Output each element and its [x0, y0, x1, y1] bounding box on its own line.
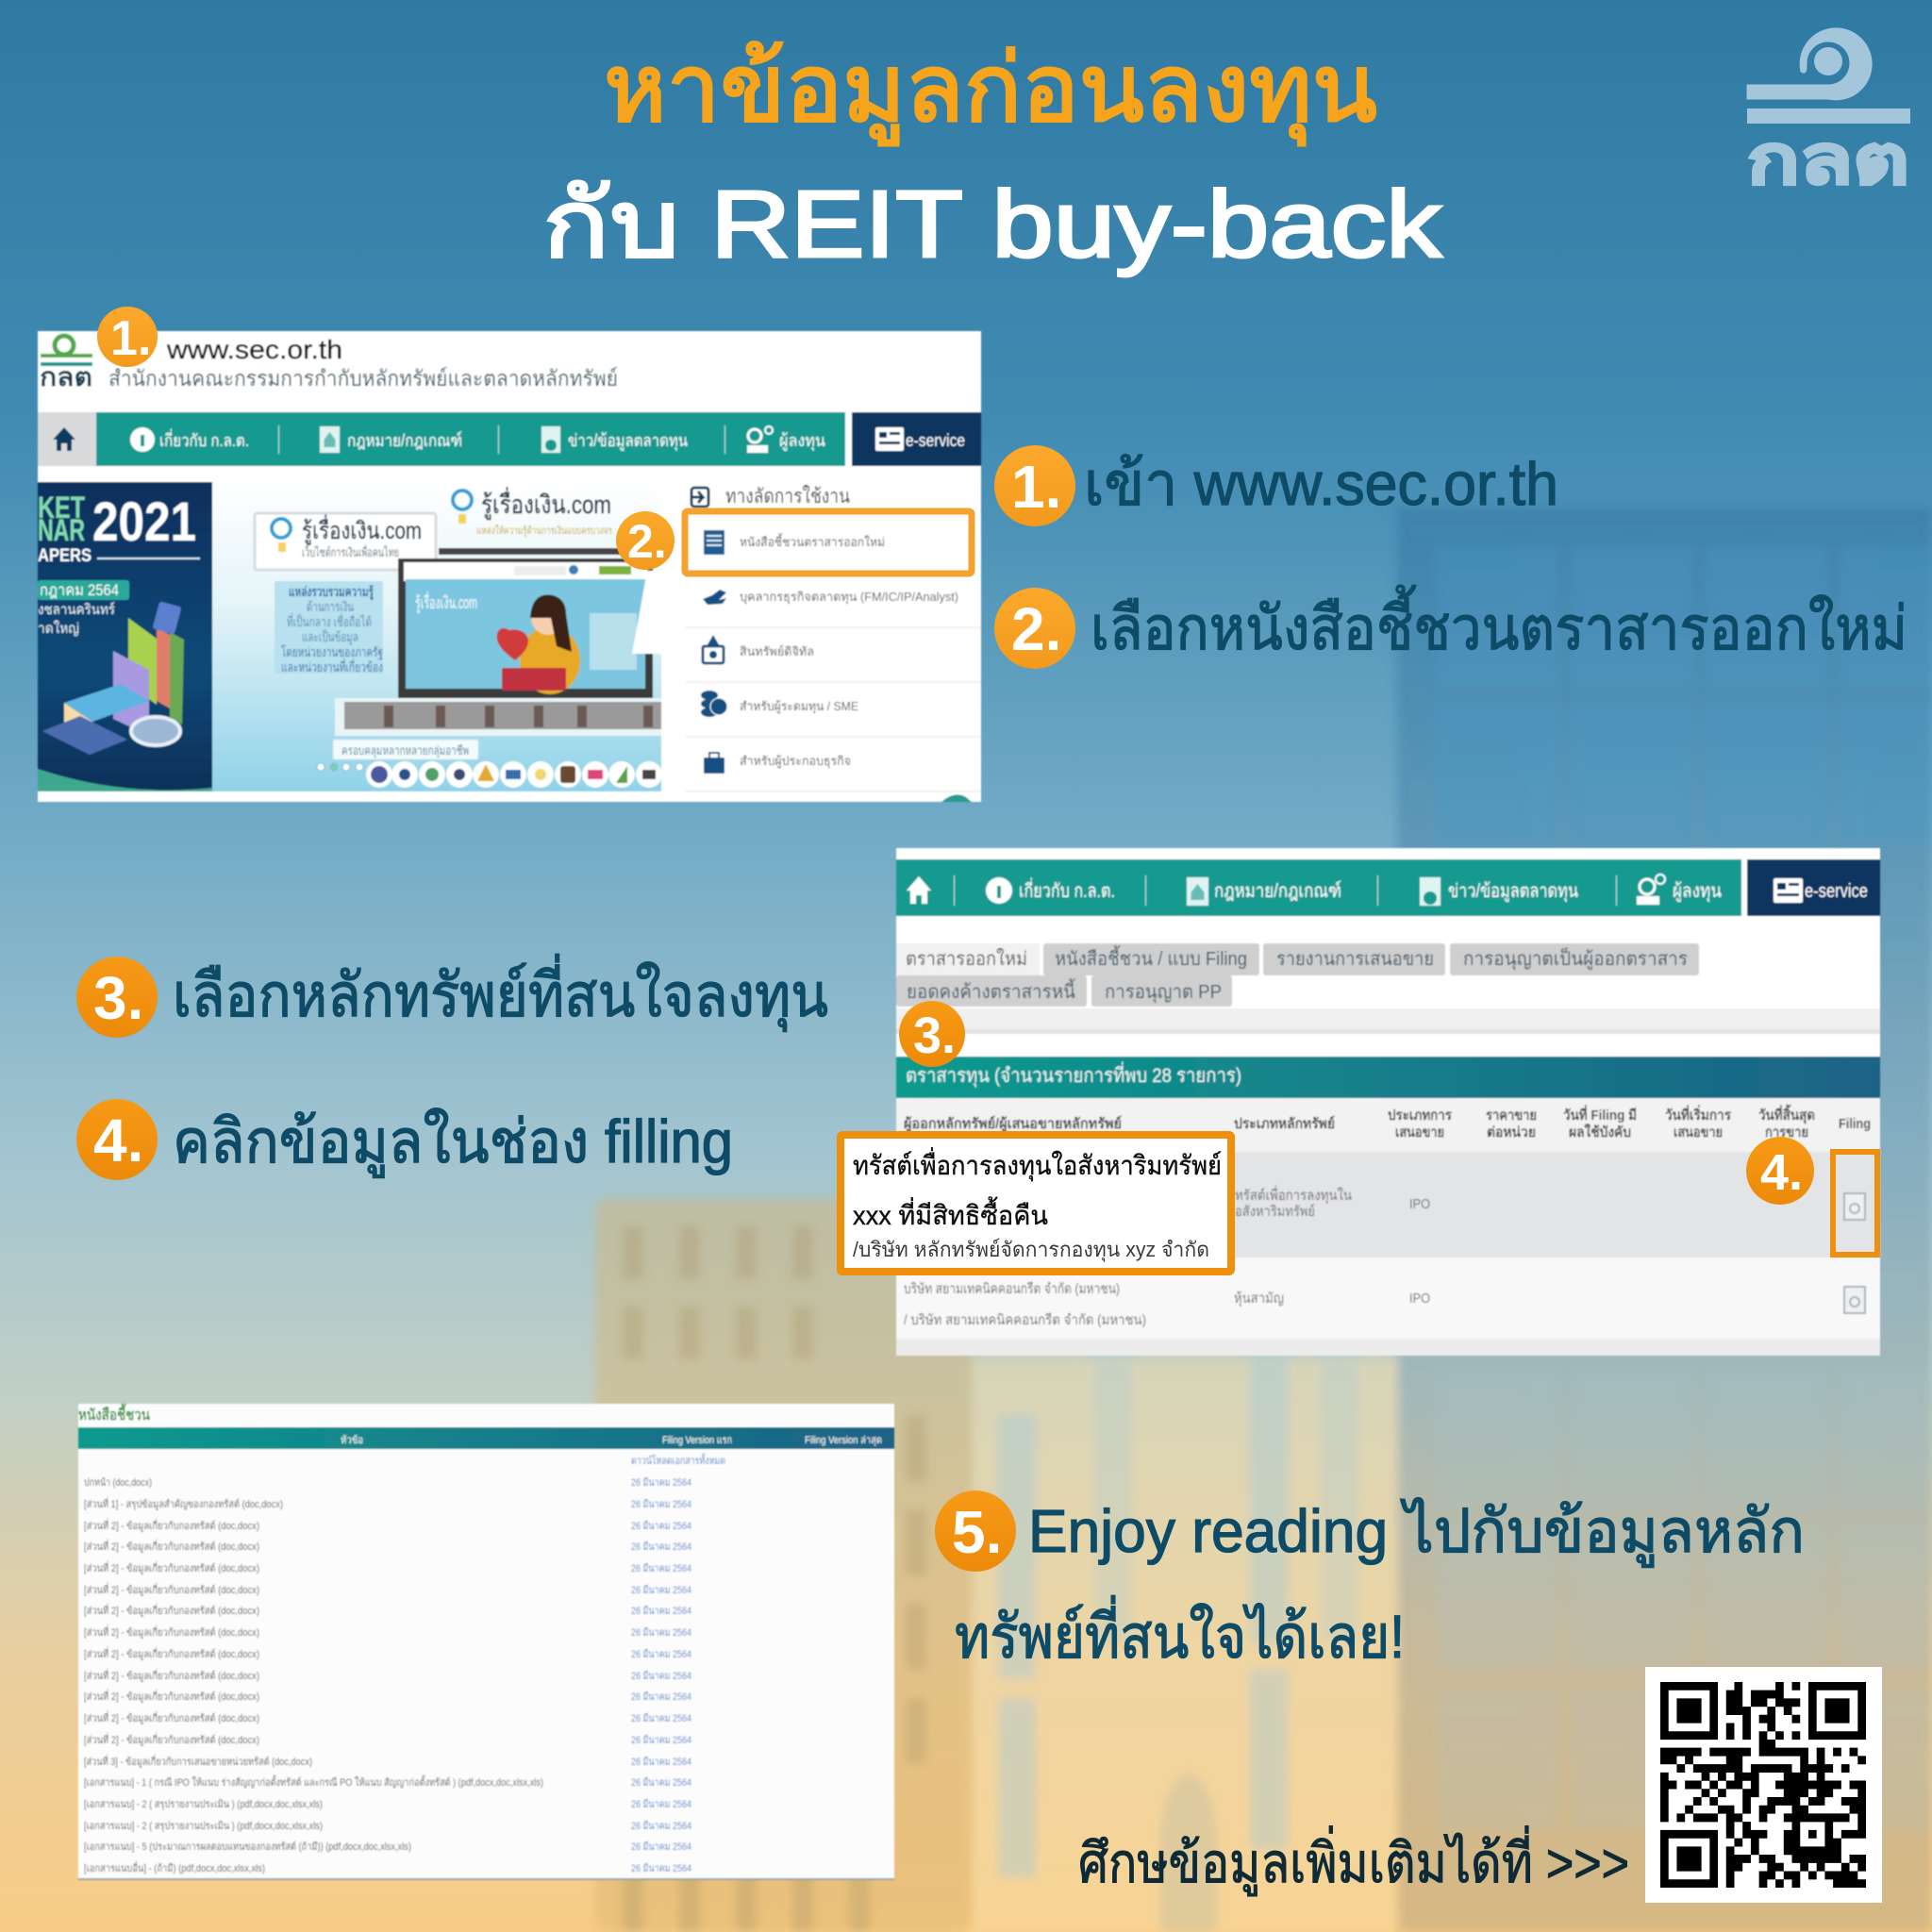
step 1 instruction — [994, 445, 1558, 526]
tabs: การอนุญาต PP — [1105, 982, 1222, 1004]
table header: หัวข้อ — [341, 1435, 363, 1446]
highlight box around prospectus link — [685, 511, 972, 574]
callout: security name box: xxx ที่มีสิทธิซื้อคืน — [853, 1196, 1048, 1230]
table: อสังหาริมทรัพย์ — [1235, 1204, 1315, 1220]
filing date links: 26 มีนาคม 2564 — [631, 1840, 691, 1853]
step 5 instruction: 5. — [952, 1498, 1002, 1566]
filing date links: ดาวน์โหลดเอกสารทั้งหมด — [631, 1453, 725, 1467]
banner: money website promo: ครอบคลุมหลากหลายกลุ่มอาชีพ — [341, 743, 469, 758]
tabs: รายงานการเสนอขาย — [1276, 949, 1434, 970]
shortcut menu — [685, 485, 981, 802]
navigation bar — [896, 859, 1880, 916]
navigation bar: e-service — [1805, 881, 1868, 902]
tabs: ยอดคงค้างตราสารหนี้ — [907, 978, 1075, 1003]
website URL: www.sec.or.th — [166, 335, 342, 364]
filing date links: 26 มีนาคม 2564 — [631, 1862, 691, 1874]
filing date links: 26 มีนาคม 2564 — [631, 1776, 691, 1789]
document rows: [ส่วนที่ 1] - สรุปข้อมูลสำคัญของกองทรัสต์ (doc,docx) — [84, 1496, 283, 1510]
filing date links: 26 มีนาคม 2564 — [631, 1798, 691, 1810]
banner: money website promo — [212, 482, 662, 791]
table: วันที่ Filing มี — [1563, 1105, 1637, 1124]
title — [542, 36, 1442, 277]
shortcut menu: สำหรับผู้ประกอบธุรกิจ — [740, 754, 851, 769]
table: IPO — [1409, 1196, 1430, 1212]
QR code — [1645, 1667, 1882, 1903]
table header: Filing Version ล่าสุด — [805, 1435, 882, 1446]
table: Filing — [1839, 1116, 1871, 1132]
filing date links: 26 มีนาคม 2564 — [631, 1648, 691, 1660]
navigation bar: ข่าว/ข้อมูลตลาดทุน — [1448, 881, 1578, 903]
callout: security name box: /บริษัท หลักทรัพย์จัดการกองทุน xyz จำกัด — [853, 1238, 1209, 1262]
table header: Filing Version แรก — [662, 1435, 732, 1446]
shortcut menu: สินทรัพย์ดิจิทัล — [740, 644, 814, 658]
document rows: [ส่วนที่ 2] - ข้อมูลเกี่ยวกับกองทรัสต์ (doc,docx) — [84, 1646, 259, 1660]
more information label: ศึกษข้อมูลเพิ่มเติมได้ที่ >>> — [1078, 1825, 1629, 1896]
table: / บริษัท สยามเทคนิคคอนกรีต จำกัด (มหาชน) — [904, 1312, 1146, 1328]
shortcut menu: สำหรับผู้ระดมทุน / SME — [740, 699, 858, 714]
banner: money website promo: เว็บไซต์การเงินเพื่อคนไทย — [302, 543, 399, 559]
document rows: [ส่วนที่ 2] - ข้อมูลเกี่ยวกับกองทรัสต์ (doc,docx) — [84, 1689, 259, 1703]
shortcut menu: ทางลัดการใช้งาน — [725, 485, 850, 508]
table: ทรัสต์เพื่อการลงทุนใน — [1235, 1185, 1352, 1205]
navigation bar: ข่าว/ข้อมูลตลาดทุน — [568, 431, 688, 451]
filing date links: 26 มีนาคม 2564 — [631, 1626, 691, 1639]
table: หุ้นสามัญ — [1234, 1291, 1284, 1307]
document rows — [84, 1477, 543, 1874]
table: ราคาขาย — [1486, 1108, 1537, 1124]
step 3 instruction — [76, 954, 828, 1038]
document rows: [ส่วนที่ 2] - ข้อมูลเกี่ยวกับกองทรัสต์ (doc,docx) — [84, 1668, 259, 1682]
banner: market seminar 2021: 2021 — [92, 491, 196, 553]
step badge 4 on screenshot: 4. — [1760, 1144, 1803, 1201]
step 1 instruction: 1. — [1011, 453, 1061, 521]
document rows: [ส่วนที่ 2] - ข้อมูลเกี่ยวกับกองทรัสต์ (doc,docx) — [84, 1582, 259, 1596]
table header band — [896, 1057, 1880, 1098]
table header — [78, 1427, 894, 1449]
filing date links: 26 มีนาคม 2564 — [631, 1541, 691, 1553]
navigation bar: กฎหมาย/กฎเกณฑ์ — [347, 431, 462, 450]
panel: issuance table screenshot — [841, 848, 1880, 1356]
panel title: หนังสือชี้ชวน — [78, 1403, 150, 1424]
step 5 instruction: ทรัพย์ที่สนใจได้เลย! — [955, 1595, 1405, 1671]
step 5 instruction — [935, 1491, 1805, 1671]
table: IPO — [1409, 1291, 1430, 1307]
step badge 2 on screenshot: 2. — [627, 515, 667, 568]
step badge 4 on screenshot — [1746, 1137, 1814, 1205]
table: ต่อหน่วย — [1487, 1124, 1536, 1141]
filing date links: 26 มีนาคม 2564 — [631, 1670, 691, 1682]
table: วันที่เริ่มการ — [1665, 1105, 1732, 1124]
banner: market seminar 2021: APERS — [38, 546, 92, 566]
step 4 instruction: คลิกข้อมูลในช่อง filling — [173, 1108, 733, 1178]
icon: filing document row 1 — [1844, 1193, 1865, 1220]
step 3 instruction: เลือกหลักทรัพย์ที่สนใจลงทุน — [173, 954, 828, 1032]
filing date links: 26 มีนาคม 2564 — [631, 1605, 691, 1617]
step badge 1 on screenshot: 1. — [110, 311, 151, 366]
website logo — [40, 336, 92, 391]
step badge 2 on screenshot — [616, 511, 675, 570]
document rows: [ส่วนที่ 2] - ข้อมูลเกี่ยวกับกองทรัสต์ (doc,docx) — [84, 1603, 259, 1617]
filing date links: 26 มีนาคม 2564 — [631, 1520, 691, 1532]
step badge 1 on screenshot — [97, 307, 158, 367]
document rows: ปกหน้า (doc,docx) — [84, 1477, 152, 1489]
banner: money website promo: และเป็นข้อมูล — [302, 628, 358, 645]
step 2 instruction: 2. — [1011, 595, 1061, 663]
banner: money website promo: ด้านการเงิน — [307, 599, 354, 614]
step 3 instruction: 3. — [93, 964, 143, 1032]
document rows: [ส่วนที่ 2] - ข้อมูลเกี่ยวกับกองทรัสต์ (doc,docx) — [84, 1518, 259, 1532]
table: เสนอขาย — [1395, 1124, 1444, 1141]
document rows: [ส่วนที่ 2] - ข้อมูลเกี่ยวกับกองทรัสต์ (doc,docx) — [84, 1732, 259, 1746]
navigation bar — [38, 412, 981, 466]
tabs: การอนุญาตเป็นผู้ออกตราสาร — [1463, 946, 1688, 971]
banner: market seminar 2021: กฎาคม 2564 — [40, 581, 119, 599]
table: บริษัท สยามเทคนิคคอนกรีต จำกัด (มหาชน) — [904, 1281, 1120, 1297]
document rows: [เอกสารแนบ] - 2 ( สรุปรายงานประเมิน ) (pdf,docx,doc,xlsx,xls) — [84, 1821, 323, 1832]
document rows: [ส่วนที่ 2] - ข้อมูลเกี่ยวกับกองทรัสต์ (doc,docx) — [84, 1560, 259, 1574]
icon: filing document row 2 — [1844, 1287, 1865, 1313]
document rows: [ส่วนที่ 3] - ข้อมูลเกี่ยวกับการเสนอขายหน่วยทรัสต์ (doc,docx) — [84, 1754, 312, 1768]
document rows: [เอกสารแนบ] - 5 (ประมาณการผลตอบแทนของกองทรัสต์ (ถ้ามี)) (pdf,docx,doc,xlsx,xls) — [84, 1840, 411, 1853]
navigation bar: กฎหมาย/กฎเกณฑ์ — [1214, 880, 1341, 902]
step 4 instruction — [76, 1099, 733, 1180]
step badge 3 on screenshot: 3. — [913, 1008, 956, 1064]
callout: security name box: ทรัสต์เพื่อการลงทุนใอสังหาริมทรัพย์ — [853, 1147, 1222, 1182]
filing date links: 26 มีนาคม 2564 — [631, 1756, 691, 1768]
navigation bar: เกี่ยวกับ ก.ล.ต. — [1019, 877, 1115, 902]
document rows: [ส่วนที่ 2] - ข้อมูลเกี่ยวกับกองทรัสต์ (doc,docx) — [84, 1539, 259, 1553]
filing date links: 26 มีนาคม 2564 — [631, 1690, 691, 1703]
step 4 instruction: 4. — [93, 1107, 143, 1174]
website subtitle: สำนักงานคณะกรรมการกำกับหลักทรัพย์และตลาดหลักทรัพย์ — [108, 366, 618, 391]
table: การขาย — [1765, 1124, 1808, 1141]
navigation bar: เกี่ยวกับ ก.ล.ต. — [159, 428, 249, 450]
document rows: [ส่วนที่ 2] - ข้อมูลเกี่ยวกับกองทรัสต์ (doc,docx) — [84, 1624, 259, 1639]
banner: market seminar 2021: งชลานครินทร์ — [38, 602, 115, 618]
banner: money website promo: ที่เป็นกลาง เชื่อถือได้ — [287, 613, 372, 629]
document rows: [เอกสารแนบอื่น] - (ถ้ามี) (pdf,docx,doc,xlsx,xls) — [84, 1860, 265, 1874]
banner: market seminar 2021 — [38, 482, 212, 791]
banner: market seminar 2021: NAR — [38, 513, 85, 547]
banner: money website promo: และหน่วยงานที่เกี่ยวข้อง — [281, 658, 383, 675]
website logo: กลต — [40, 362, 92, 391]
table: ประเภทหลักทรัพย์ — [1234, 1115, 1335, 1132]
filing date links: 26 มีนาคม 2564 — [631, 1712, 691, 1724]
panel: prospectus document list screenshot — [78, 1403, 894, 1880]
filing date links: 26 มีนาคม 2564 — [631, 1820, 691, 1832]
filing date links: 26 มีนาคม 2564 — [631, 1562, 691, 1574]
filing date links: 26 มีนาคม 2564 — [631, 1498, 691, 1510]
navigation bar: ผู้ลงทุน — [779, 431, 825, 451]
shortcut menu: หนังสือชี้ชวนตราสารออกใหม่ — [740, 533, 885, 549]
tabs: หนังสือชี้ชวน / แบบ Filing — [1055, 945, 1247, 970]
banner: money website promo: แหล่งให้ความรู้ด้านการเงินแบบครบวงจร — [476, 525, 612, 537]
logo: SEC mark — [1747, 28, 1910, 198]
title line 1: หาข้อมูลก่อนลงทุน — [604, 36, 1377, 146]
document rows: [เอกสารแนบ] - 1 ( กรณี IPO ให้แนบ ร่างสัญญาก่อตั้งทรัสต์ และกรณี PO ให้แนบ สัญญาก่อตั้งทรัสต์ ) (pdf,docx,doc,xlsx,xls) — [84, 1774, 543, 1789]
table: วันที่สิ้นสุด — [1758, 1104, 1815, 1124]
table: ผลใช้บังคับ — [1569, 1124, 1631, 1141]
filing date links: 26 มีนาคม 2564 — [631, 1734, 691, 1746]
tabs: ตราสารออกใหม่ — [906, 948, 1027, 970]
table: ประเภทการ — [1388, 1108, 1453, 1124]
step 1 instruction: เข้า www.sec.or.th — [1084, 450, 1558, 518]
filing date links — [631, 1453, 725, 1874]
step badge 3 on screenshot — [899, 1001, 965, 1067]
filing date links: 26 มีนาคม 2564 — [631, 1476, 691, 1489]
table: เสนอขาย — [1674, 1124, 1723, 1141]
banner: money website promo: รู้เรื่องเงิน.com — [302, 514, 422, 545]
logo: SEC mark: กลต — [1747, 123, 1909, 198]
title line 2: กับ REIT buy-back — [542, 172, 1442, 277]
navigation bar: ผู้ลงทุน — [1673, 881, 1722, 903]
filing date links: 26 มีนาคม 2564 — [631, 1584, 691, 1596]
banner: money website promo: แหล่งรวบรวมความรู้ — [289, 584, 374, 600]
step 5 instruction: Enjoy reading ไปกับข้อมูลหลัก — [1028, 1497, 1805, 1568]
navigation bar: e-service — [906, 431, 965, 450]
banner: money website promo: รู้เรื่องเงิน.com — [481, 487, 611, 520]
banner: money website promo: โดยหน่วยงานของภาครัฐ — [281, 644, 383, 660]
panel: SEC website home screenshot — [38, 307, 981, 802]
banner: market seminar 2021: KET — [38, 491, 85, 525]
banner: market seminar 2021: าดใหญ่ — [38, 620, 79, 637]
shortcut menu: บุคลากรธุรกิจตลาดทุน (FM/IC/IP/Analyst) — [740, 590, 958, 605]
table: ผู้ออกหลักทรัพย์/ผู้เสนอขายหลักทรัพย์ — [904, 1115, 1122, 1133]
table — [896, 1098, 1880, 1356]
banner: money website promo: รู้เรื่องเงิน.com — [415, 591, 477, 613]
document rows: [ส่วนที่ 2] - ข้อมูลเกี่ยวกับกองทรัสต์ (doc,docx) — [84, 1710, 259, 1724]
tabs — [896, 943, 1699, 1007]
callout: security name box — [841, 1135, 1231, 1272]
document rows: [เอกสารแนบ] - 2 ( สรุปรายงานประเมิน ) (pdf,docx,doc,xlsx,xls) — [84, 1799, 323, 1810]
table header band: ตราสารทุน (จำนวนรายการที่พบ 28 รายการ) — [906, 1061, 1241, 1088]
highlight box: filing column — [1833, 1152, 1877, 1255]
